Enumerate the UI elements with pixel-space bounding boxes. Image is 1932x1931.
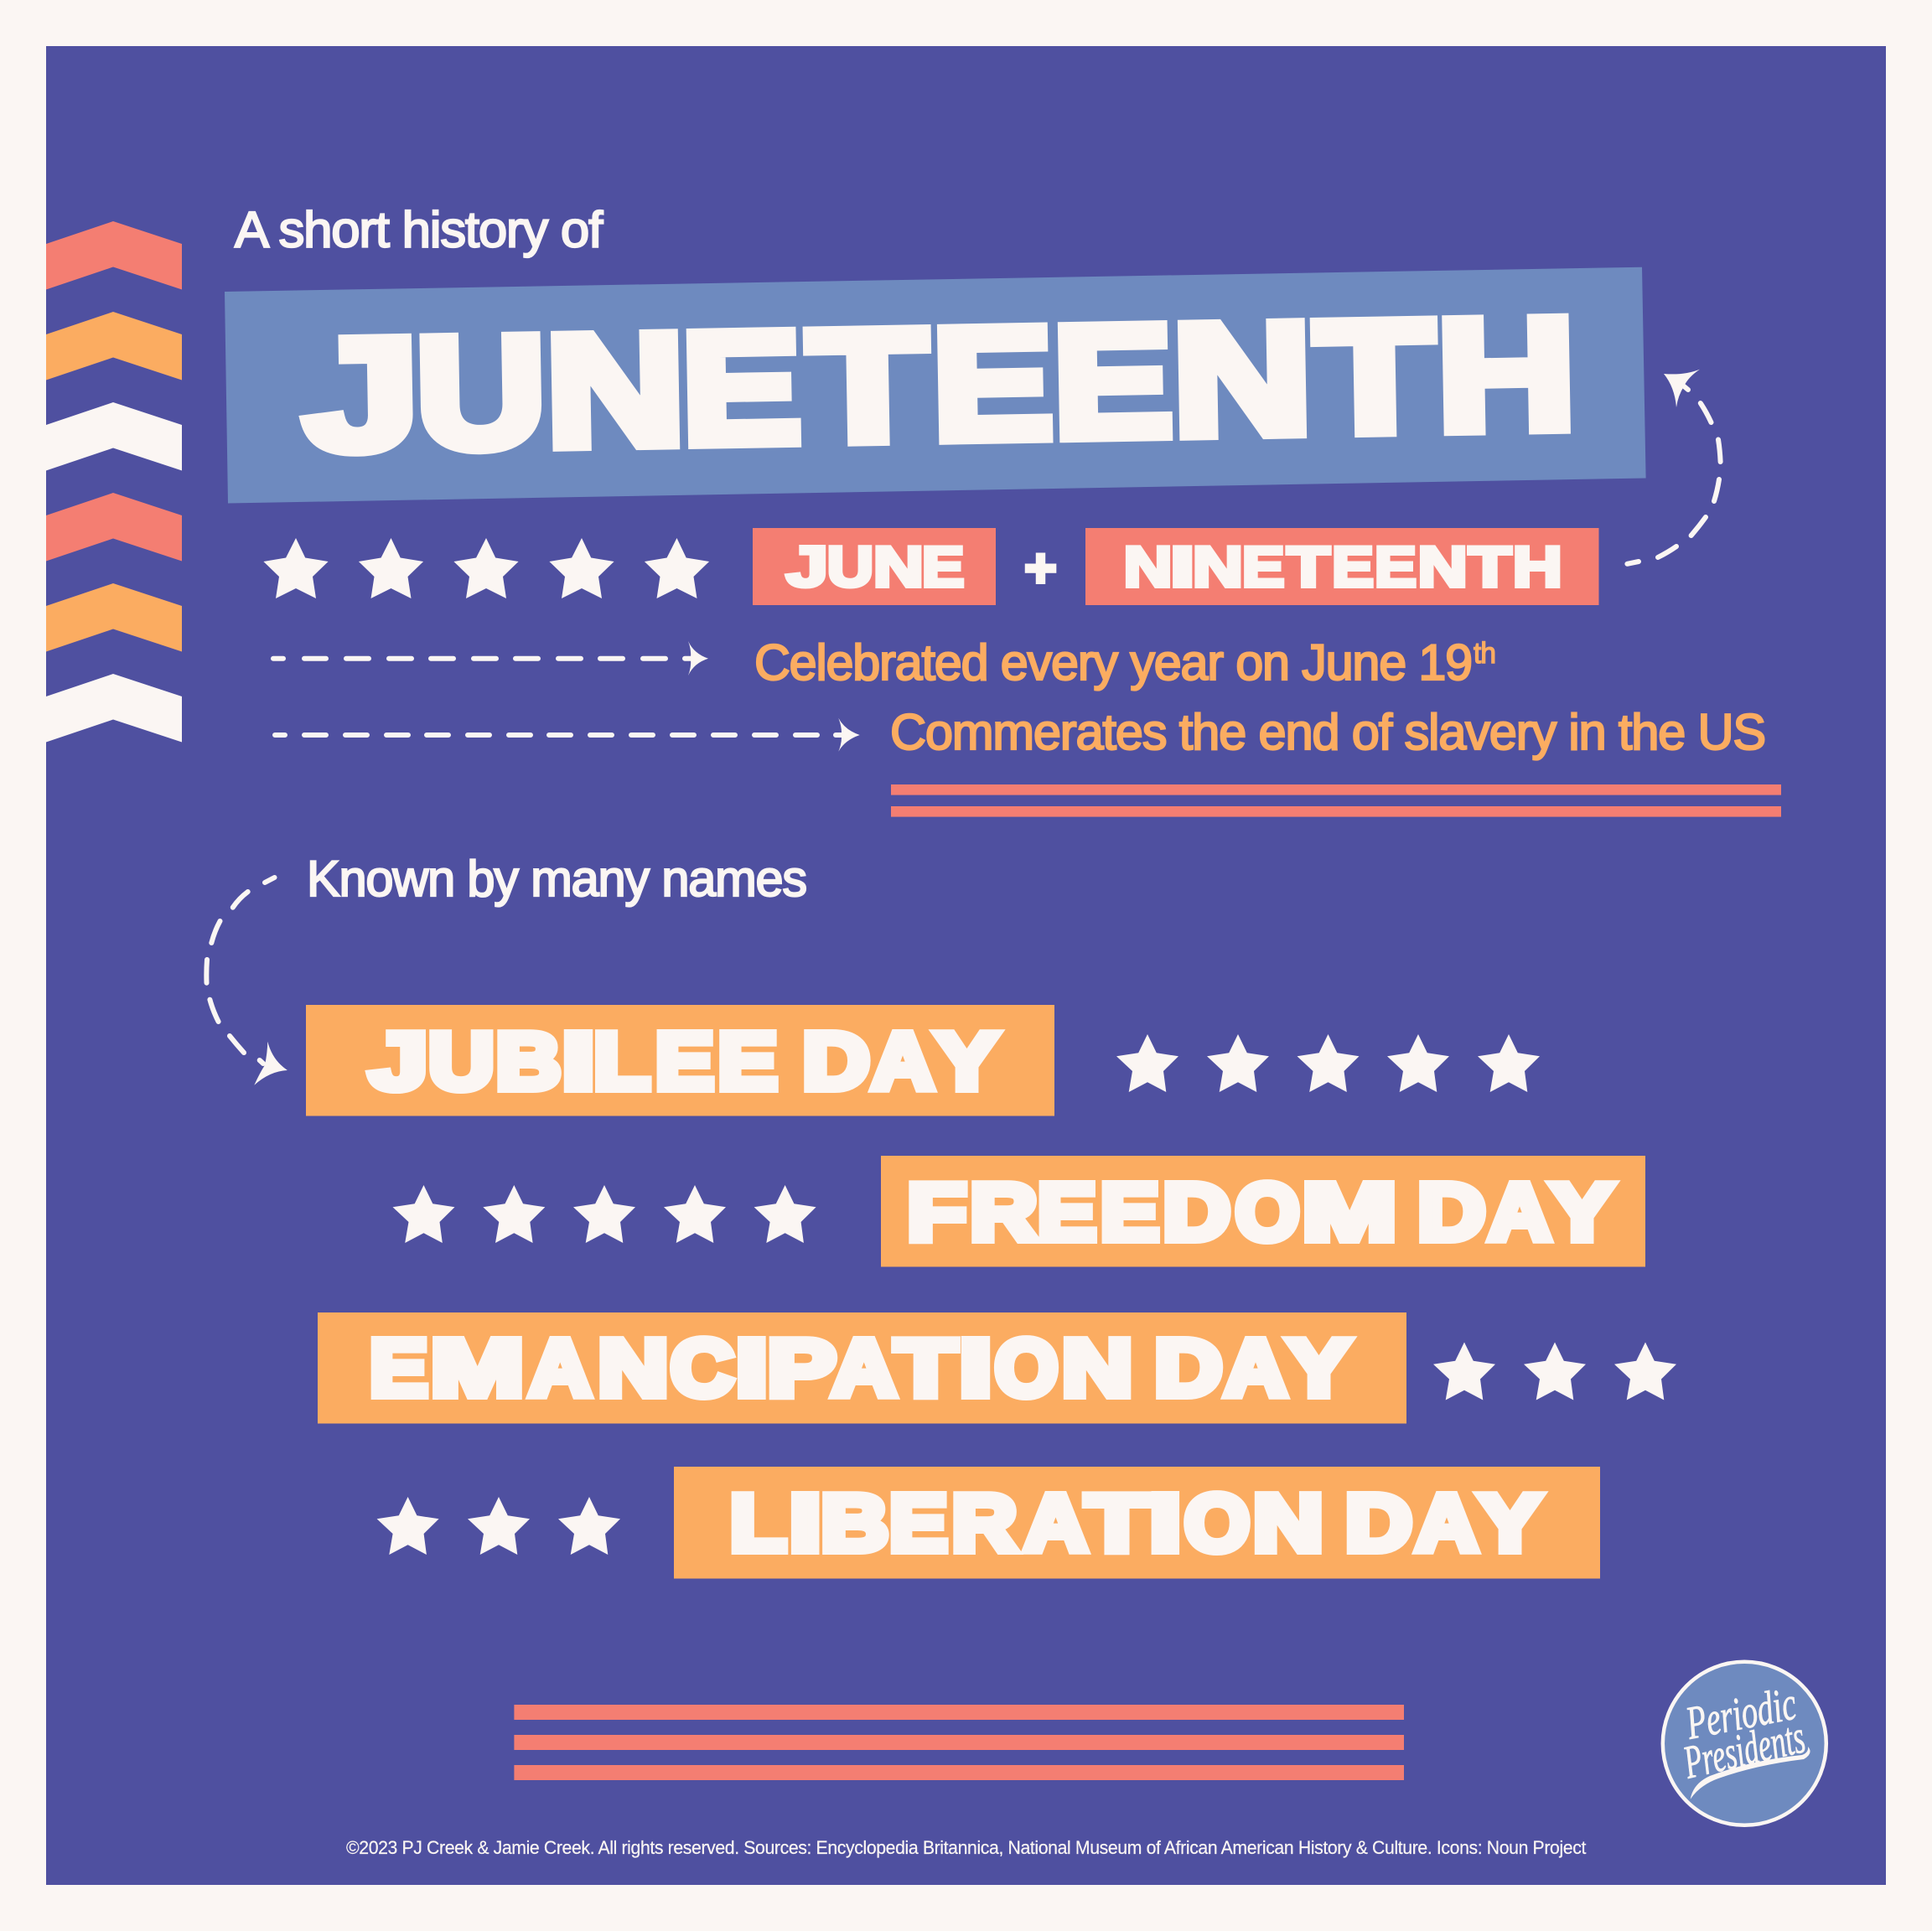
- title banner: [225, 267, 1646, 503]
- name: Liberation Day: B: [821, 1478, 888, 1568]
- name: Emancipation Day: [318, 1312, 1406, 1423]
- title: JUNETEENTH: E: [931, 294, 1054, 474]
- name: Liberation Day: A: [1416, 1478, 1478, 1568]
- label: NINETEENTH: E: [1332, 535, 1374, 598]
- name: Emancipation Day: O: [995, 1323, 1058, 1413]
- name: Jubilee Day: L: [593, 1017, 650, 1106]
- name: Jubilee Day: B: [496, 1017, 561, 1106]
- title: JUNETEENTH: N: [545, 301, 686, 480]
- title: JUNETEENTH: E: [681, 299, 802, 478]
- name: Liberation Day: I: [790, 1478, 821, 1568]
- name: Jubilee Day: E: [718, 1017, 778, 1106]
- date text: Celebrated every year on June 19: [754, 634, 1472, 691]
- name: Freedom Day: D: [1163, 1167, 1230, 1257]
- banner background: [225, 267, 1646, 503]
- name: Emancipation Day: I: [736, 1323, 768, 1413]
- logo: Periodic Presidents: Periodic: [1681, 1678, 1800, 1750]
- label: NINETEENTH: T: [1287, 535, 1330, 598]
- name: Emancipation Day: N: [598, 1323, 668, 1413]
- name: Emancipation Day: E: [370, 1323, 427, 1413]
- name: Freedom Day: E: [1038, 1167, 1096, 1257]
- name: Liberation Day: Y: [1479, 1478, 1541, 1568]
- name: Freedom Day: Y: [1551, 1167, 1613, 1257]
- name: Jubilee Day: J: [370, 1017, 427, 1106]
- name: Emancipation Day: N: [1062, 1323, 1132, 1413]
- name: Liberation Day: T: [1086, 1478, 1148, 1568]
- name: Liberation Day: O: [1184, 1478, 1250, 1568]
- label: NINETEENTH: H: [1513, 535, 1562, 598]
- title: JUNETEENTH: E: [1052, 292, 1173, 471]
- dashed arrow to commemoration line: [275, 718, 860, 752]
- name: Emancipation Day: T: [895, 1323, 956, 1413]
- name: Jubilee Day: E: [655, 1017, 714, 1106]
- label: JUNE: J: [786, 535, 828, 598]
- name: Liberation Day: [674, 1467, 1600, 1579]
- title: JUNETEENTH: H: [1436, 286, 1577, 464]
- name: Jubilee Day: A: [872, 1017, 934, 1106]
- commemoration text: Commerates the end of slavery in the US: [890, 704, 1765, 760]
- name: Emancipation Day: A: [1225, 1323, 1287, 1413]
- date text: th: [1474, 637, 1495, 670]
- name: Liberation Day: D: [1345, 1478, 1412, 1568]
- label: NINETEENTH: [1085, 528, 1599, 605]
- name: Emancipation Day: C: [671, 1323, 733, 1413]
- chevron: coral: [46, 221, 182, 290]
- name: Liberation Day: I: [1150, 1478, 1181, 1568]
- title: JUNETEENTH: T: [1314, 288, 1435, 467]
- name: Freedom Day: F: [908, 1167, 966, 1257]
- chevrons column: [46, 221, 182, 743]
- section heading: Known by many names: [307, 851, 806, 907]
- chevron: coral: [46, 493, 182, 562]
- label: NINETEENTH: N: [1418, 535, 1468, 598]
- name: Jubilee Day: U: [428, 1017, 495, 1106]
- name: Emancipation Day: A: [831, 1323, 896, 1413]
- title: JUNETEENTH: N: [1171, 290, 1313, 469]
- double stripes: [891, 784, 1781, 817]
- footer credits: ©2023 PJ Creek & Jamie Creek. All rights reserved. Sources: Encyclopedia Britannica, National Museum of African American History & Culture. Icons: Noun Project: [346, 1837, 1587, 1858]
- name: Jubilee Day: D: [803, 1017, 870, 1106]
- stars after Jubilee Day: [1116, 1034, 1540, 1092]
- logo: Periodic Presidents: Presidents: [1678, 1711, 1810, 1789]
- name: Liberation Day: N: [1253, 1478, 1323, 1568]
- triple stripes: [514, 1705, 1404, 1780]
- name: Freedom Day: [881, 1156, 1645, 1267]
- stars before Liberation Day: [377, 1497, 620, 1555]
- curved dashed arrow up to title: [1627, 370, 1721, 564]
- name: Freedom Day: E: [1101, 1167, 1159, 1257]
- label: NINETEENTH: N: [1193, 535, 1243, 598]
- title: JUNETEENTH: J: [303, 306, 421, 484]
- name: Freedom Day: D: [1418, 1167, 1485, 1257]
- intro heading: A short history of: [235, 201, 603, 258]
- name: Emancipation Day: Y: [1287, 1323, 1350, 1413]
- chevron: orange: [46, 312, 182, 381]
- title: JUNETEENTH: T: [807, 297, 929, 476]
- label: NINETEENTH: T: [1468, 535, 1511, 598]
- stars row beside June plus Nineteenth: [263, 538, 709, 598]
- chevron: cream: [46, 402, 182, 471]
- name: Freedom Day: R: [971, 1167, 1037, 1257]
- name: Jubilee Day: I: [562, 1017, 594, 1106]
- name: Liberation Day: L: [730, 1478, 786, 1568]
- label: JUNE: U: [827, 535, 873, 598]
- name: Liberation Day: E: [889, 1478, 947, 1568]
- label: JUNE: E: [922, 535, 964, 598]
- label: NINETEENTH: I: [1170, 535, 1195, 598]
- stars before Freedom Day: [392, 1185, 816, 1243]
- name: Emancipation Day: M: [431, 1323, 524, 1413]
- logo: Periodic Presidents: [1663, 1662, 1826, 1825]
- name: Jubilee Day: Y: [935, 1017, 998, 1106]
- stars after Emancipation Day: [1433, 1343, 1676, 1400]
- plus sign: +: [1024, 536, 1057, 598]
- label: NINETEENTH: E: [1242, 535, 1284, 598]
- dashed arrow to date line: [273, 641, 708, 676]
- chevron: orange: [46, 583, 182, 652]
- name: Emancipation Day: I: [960, 1323, 992, 1413]
- name: Jubilee Day: [306, 1005, 1054, 1116]
- name: Freedom Day: M: [1303, 1167, 1396, 1257]
- name: Freedom Day: O: [1235, 1167, 1299, 1257]
- title: JUNETEENTH: U: [415, 303, 547, 483]
- name: Freedom Day: A: [1489, 1167, 1551, 1257]
- label: NINETEENTH: N: [1123, 535, 1172, 598]
- name: Liberation Day: R: [952, 1478, 1017, 1568]
- chevron: cream: [46, 674, 182, 743]
- name: Emancipation Day: D: [1155, 1323, 1222, 1413]
- label: NINETEENTH: E: [1375, 535, 1417, 598]
- name: Emancipation Day: P: [768, 1323, 836, 1413]
- name: Liberation Day: A: [1024, 1478, 1087, 1568]
- label: JUNE: [753, 528, 996, 605]
- label: JUNE: N: [873, 535, 924, 598]
- name: Emancipation Day: A: [530, 1323, 591, 1413]
- curved dashed arrow to names: [206, 877, 287, 1085]
